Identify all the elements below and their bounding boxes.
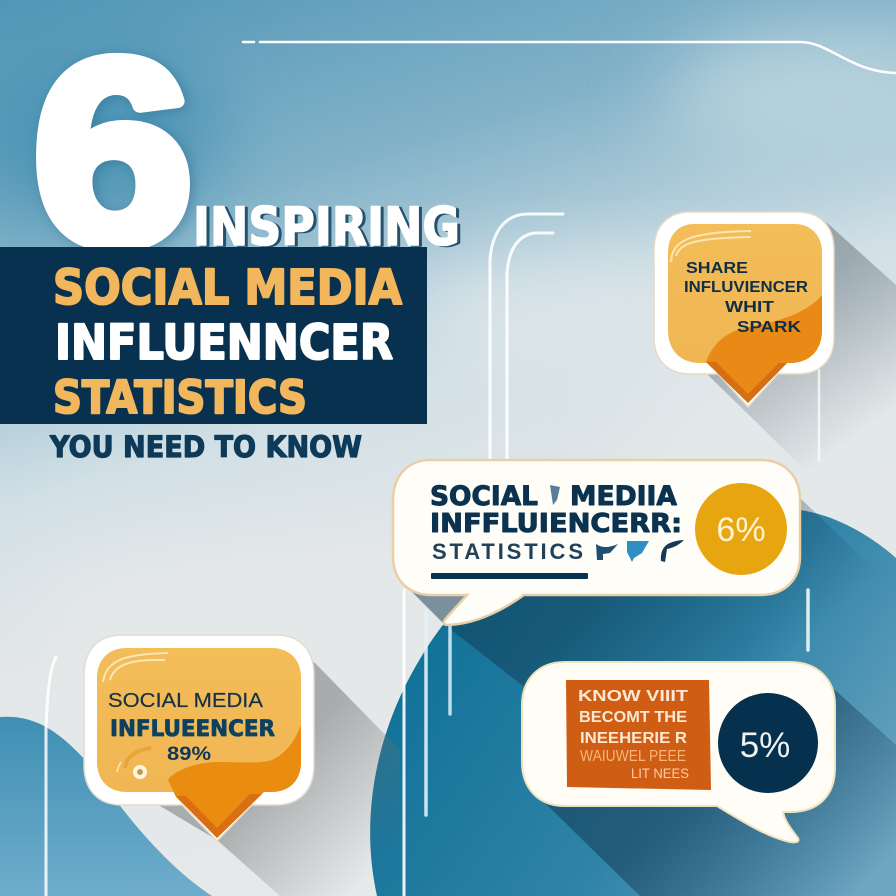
panel text: LIT NEES — [631, 765, 689, 781]
bubble heading — [430, 481, 682, 539]
stat circle — [695, 483, 787, 575]
bubble heading: SOCIAL — [430, 481, 538, 512]
bubble text — [684, 260, 808, 336]
small icons — [550, 485, 684, 562]
subtitle: YOU NEED TO KNOW — [49, 430, 362, 464]
bubble: bottom right — [522, 662, 835, 842]
panel text: KNOW VIIIT — [578, 688, 688, 705]
bubble: bottom left — [84, 635, 314, 841]
bubble text: INFLUVIENCER — [684, 279, 808, 296]
bubble: middle — [393, 460, 800, 625]
bubble: bottom left: INFLUEENCER — [110, 717, 275, 742]
panel fill — [97, 648, 301, 792]
bubble heading: INFFLUIENCERR: — [430, 509, 682, 539]
word: inspiring: INSPIRING — [196, 198, 463, 259]
highlight — [671, 231, 751, 262]
bubble text: SHARE — [686, 260, 748, 277]
bubble text: WHIT — [725, 299, 774, 316]
title banner — [0, 247, 427, 424]
title line: social media: SOCIAL MEDIA — [53, 260, 402, 316]
bubble: bottom left: 89% — [167, 744, 211, 765]
orange accent — [168, 725, 301, 838]
stat circle — [718, 693, 818, 793]
highlight — [103, 653, 168, 682]
blue shape: bottom right — [370, 509, 896, 896]
panel text — [578, 688, 689, 781]
bubble shadows — [150, 215, 896, 896]
orange accent — [706, 295, 822, 403]
bubble text: SOCIAL MEDIA — [108, 690, 264, 712]
blue shape: bottom left — [0, 717, 212, 896]
title block — [0, 7, 463, 464]
title line: influenncer: INFLUENNCER — [55, 315, 393, 371]
title line: statistics: STATISTICS — [53, 371, 307, 424]
word: inspiring: INSPIRING — [193, 197, 460, 258]
orange text panel — [566, 680, 711, 790]
bubble text: SPARK — [737, 319, 802, 336]
underline — [431, 573, 588, 579]
small signal icon — [117, 748, 151, 777]
stat value: 5% — [740, 726, 790, 765]
big number 6: 6 — [33, 7, 193, 299]
panel text: INEEHERIE R — [580, 730, 687, 747]
bubble heading: MEDIIA — [570, 481, 677, 512]
bubble subheading: STATISTICS — [432, 539, 583, 564]
stat value: 6% — [716, 511, 766, 549]
panel fill — [668, 224, 822, 363]
panel text: WAIUWEL PEEE — [580, 748, 686, 765]
panel text: BECOMT THE — [579, 709, 687, 726]
bubble: top right — [654, 212, 834, 407]
big number 6 shadow: 6 — [36, 9, 196, 301]
